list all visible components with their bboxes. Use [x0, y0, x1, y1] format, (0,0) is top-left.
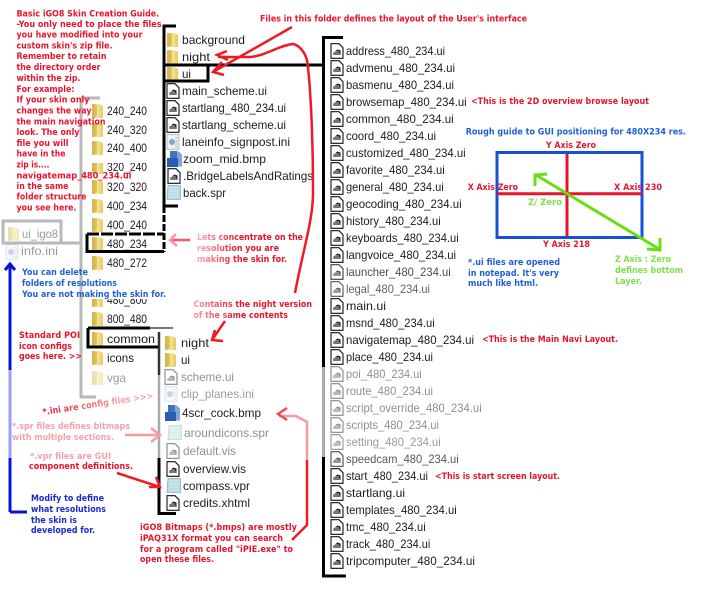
- heading: guide intro text: the main navigation: [16, 117, 106, 127]
- callout: modify info.ini: developed for.: [31, 526, 95, 536]
- callout: browse layout: <This is the 2D overview browse layout: [471, 97, 650, 107]
- panel: 480_234 ui file list: script_override_480_234.ui: [346, 401, 482, 415]
- panel: 480_234 ui file list: general_480_234.ui: [346, 180, 444, 194]
- callout: delete folders: You are not making the skin for.: [21, 290, 166, 300]
- callout: resolution focus: making the skin for.: [197, 255, 287, 265]
- panel: 480_234 ui file list: history_480_234.ui: [346, 214, 441, 228]
- callout: resolution focus: resolution you are: [197, 244, 279, 254]
- arrow: to 4scr_cock.bmp: [278, 408, 307, 540]
- axis labels: Y Axis Zero: [545, 141, 596, 151]
- heading: guide intro text: have in the: [16, 150, 66, 160]
- panel: 480_234 ui file list: tripcomputer_480_234.ui: [346, 554, 475, 568]
- panel: resolution folder list: 240_320: [107, 123, 147, 137]
- axis labels: X Axis Zero: [468, 183, 518, 193]
- note: ui files in notepad: [468, 258, 560, 289]
- callout: bitmap format: iGO8 Bitmaps (*.bmps) are mostly: [140, 523, 297, 533]
- panel: ui folder contents: [167, 33, 313, 200]
- panel: 480_234 ui file list: geocoding_480_234.ui: [346, 197, 462, 211]
- callout: vpr files: [29, 452, 133, 472]
- arrow: to compass.vpr: [117, 473, 160, 487]
- panel: resolution folder list: 240_400: [107, 141, 147, 155]
- panel: 480_234 ui file list: setting_480_234.ui: [346, 435, 441, 449]
- arrow: blue resolution bracket: [5, 264, 27, 512]
- panel: common folder contents: ui: [181, 353, 190, 367]
- panel: common folder contents: credits.xhtml: [183, 496, 250, 510]
- panel: 480_234 ui file list: langvoice_480_234.ui: [346, 248, 456, 262]
- arrow: to common night folder: [212, 321, 225, 341]
- panel: common folder contents: compass.vpr: [183, 479, 250, 493]
- callout: ini files: *.ini are config files >>>: [42, 392, 154, 418]
- heading: guide intro text: navigatemap_480_234.ui: [16, 171, 132, 181]
- heading: GUI positioning guide: Rough guide to GUI positioning for 480X234 res.: [466, 128, 686, 138]
- panel: ui folder contents: main_scheme.ui: [182, 84, 267, 98]
- callout: bitmap format: for a program called "iPIE.exe" to: [140, 545, 293, 555]
- callout: spr files: [12, 422, 130, 443]
- callout: POI icon configs: [19, 331, 82, 362]
- callout: POI icon configs: goes here. >>: [19, 352, 82, 362]
- heading: guide intro text: look. The only: [16, 128, 80, 138]
- panel: 480_234 ui file list: main.ui: [346, 299, 386, 313]
- callout: modify info.ini: the skin is: [31, 516, 77, 526]
- panel: 480_234 ui file list: tmc_480_234.ui: [346, 520, 426, 534]
- panel: 480_234 ui file list: startlang.ui: [346, 486, 405, 500]
- note: z axis: [615, 255, 683, 287]
- panel: resolution folder list: 240_240: [107, 104, 147, 118]
- panel: 480_234 ui file list: favorite_480_234.ui: [346, 163, 445, 177]
- heading: guide intro text: folder structure: [16, 193, 86, 203]
- panel: 480_234 ui file list: poi_480_234.ui: [346, 367, 422, 381]
- arrow: to aroundicons.spr: [125, 428, 160, 442]
- callout: files in this folder: Files in this folder defines the layout of the User's interface: [260, 14, 527, 24]
- callout: vpr files: component definitions.: [29, 462, 133, 472]
- panel: 480_234 ui file list: basmenu_480_234.ui: [346, 78, 454, 92]
- panel: 480_234 ui file list: customized_480_234.ui: [346, 146, 466, 160]
- panel: 480_234 ui file list: scripts_480_234.ui: [346, 418, 439, 432]
- heading: guide intro text: file you will: [16, 139, 68, 149]
- folder tree brackets: [3, 26, 346, 576]
- panel: 480_234 ui file list: legal_480_234.ui: [346, 282, 430, 296]
- heading: guide intro text: you have modified into your: [16, 31, 143, 41]
- panel: ui folder contents: laneinfo_signpost.ini: [182, 135, 290, 149]
- heading: guide intro text: zip is....: [16, 161, 50, 171]
- heading: guide intro text: [16, 10, 162, 214]
- y axis line: [566, 154, 568, 236]
- panel: ui folder contents: ui: [182, 67, 191, 81]
- panel: common folder contents: scheme.ui: [181, 370, 234, 384]
- panel: resolution folder list: 320_320: [107, 180, 147, 194]
- screen rectangle: [497, 152, 642, 238]
- panel: 480_234 ui file list: msnd_480_234.ui: [346, 316, 435, 330]
- callout: delete folders: [21, 268, 166, 300]
- panel: common folder contents: night: [181, 336, 210, 350]
- callout: POI icon configs: icon configs: [19, 342, 72, 352]
- panel: common folder contents: aroundicons.spr: [184, 426, 269, 440]
- panel: ui folder contents: .BridgeLabelsAndRatings: [183, 169, 313, 183]
- panel: resolution folder list: 480_234: [107, 237, 147, 251]
- panel: 480_234 ui file list: start_480_234.ui: [346, 469, 428, 483]
- z axis arrow: [535, 174, 660, 250]
- arrow: to night folder and file list: [217, 44, 313, 293]
- panel: resolution folder list: common: [107, 332, 155, 346]
- panel: ui folder contents: startlang_480_234.ui: [182, 101, 286, 115]
- note: ui files in notepad: much like html.: [468, 279, 538, 289]
- heading: guide intro text: custom skin's zip file.: [16, 41, 112, 51]
- callout: bitmap format: [140, 523, 297, 565]
- callout: modify info.ini: what resolutions: [31, 505, 106, 515]
- panel: ui folder contents: zoom_mid.bmp: [183, 152, 266, 166]
- heading: guide intro text: For example:: [16, 85, 74, 95]
- panel: ui folder contents: startlang_scheme.ui: [182, 118, 286, 132]
- panel: 480_234 ui file list: common_480_234.ui: [346, 112, 454, 126]
- panel: common folder contents: overview.vis: [183, 462, 246, 476]
- callout: modify info.ini: [31, 494, 106, 536]
- axis labels: Y Axis 218: [542, 240, 590, 250]
- note: z axis: Z Axis : Zero: [615, 255, 671, 265]
- callout: bitmap format: iPAQ31X format you can search: [140, 534, 283, 544]
- callout: night version: Contains the night version: [194, 300, 312, 310]
- panel: resolution folder list: 400_234: [107, 199, 147, 213]
- panel: resolution folder list: 800_480: [107, 312, 147, 326]
- panel: 480_234 ui file list: advmenu_480_234.ui: [346, 61, 455, 75]
- panel: skin root folder: [6, 227, 58, 259]
- panel: ui folder contents: background: [182, 33, 245, 47]
- panel: 480_234 ui file list: navigatemap_480_234.ui: [346, 333, 474, 347]
- note: ui files in notepad: in notepad. It's very: [468, 269, 559, 279]
- callout: resolution focus: [197, 233, 303, 265]
- panel: resolution folder list: 320_240: [107, 160, 147, 174]
- panel: 480_234 ui file list: address_480_234.ui: [346, 44, 445, 58]
- panel: ui folder contents: night: [182, 50, 211, 64]
- heading: guide intro text: Remember to retain: [16, 52, 106, 62]
- callout: night version: of the same contents: [194, 311, 288, 321]
- panel: resolution folder list: 480_272: [107, 256, 147, 270]
- panel: skin root folder: ui_igo8: [22, 227, 58, 241]
- panel: resolution folder list: vga: [107, 371, 126, 385]
- callout: spr files: with multiple sections.: [12, 433, 114, 443]
- panel: 480_234 ui file list: speedcam_480_234.ui: [346, 452, 459, 466]
- panel: common folder contents: default.vis: [183, 444, 236, 458]
- axis labels: [468, 141, 662, 250]
- arrow: to ui folder: [213, 27, 292, 75]
- panel: resolution folder list: icons: [107, 351, 134, 365]
- callout: resolution focus: Lets concentrate on the: [197, 233, 303, 243]
- chart: GUI axis diagram: [468, 141, 662, 250]
- panel: 480_234 ui file list: launcher_480_234.ui: [346, 265, 451, 279]
- panel: common folder contents: clip_planes.ini: [181, 387, 254, 401]
- axis labels: X Axis 230: [614, 183, 662, 193]
- callout: modify info.ini: Modify to define: [31, 494, 104, 504]
- arrow: to 480_234 folder: [170, 234, 190, 246]
- heading: guide intro text: -You only need to place the files: [16, 20, 162, 30]
- heading: guide intro text: within the zip.: [16, 74, 80, 84]
- heading: guide intro text: you see here.: [16, 204, 76, 214]
- panel: 480_234 ui file list: route_480_234.ui: [346, 384, 433, 398]
- axis labels: Z/ Zero: [528, 198, 562, 208]
- panel: resolution folder list: [86, 104, 156, 385]
- panel: skin root folder: info.ini: [21, 244, 58, 258]
- callout: delete folders: folders of resolutions: [22, 279, 117, 289]
- panel: resolution folder list: 400_240: [107, 218, 147, 232]
- callout: vpr files: *.vpr files are GUI: [30, 452, 111, 462]
- panel: 480_234 ui file list: coord_480_234.ui: [346, 129, 436, 143]
- heading: guide intro text: the directory order: [16, 63, 101, 73]
- panel: resolution folder list: 480_800: [107, 293, 147, 307]
- heading: guide intro text: in the same: [16, 182, 68, 192]
- callout: spr files: *.spr files defines bitmaps: [12, 422, 130, 432]
- callout: bitmap format: open these files.: [140, 555, 214, 565]
- panel: 480_234 ui file list: place_480_234.ui: [346, 350, 433, 364]
- callout: delete folders: You can delete: [21, 268, 88, 278]
- panel: 480_234 ui file list: [331, 44, 482, 568]
- callout: night version: [194, 300, 312, 321]
- panel: 480_234 ui file list: track_480_234.ui: [346, 537, 430, 551]
- panel: common folder contents: 4scr_cock.bmp: [182, 406, 261, 420]
- panel: common folder contents: [165, 336, 269, 510]
- note: z axis: Layer.: [615, 277, 642, 287]
- note: z axis: defines bottom: [615, 266, 683, 276]
- panel: 480_234 ui file list: keyboards_480_234.ui: [346, 231, 459, 245]
- panel: 480_234 ui file list: templates_480_234.ui: [346, 503, 457, 517]
- note: ui files in notepad: *.ui files are opened: [468, 258, 560, 268]
- callout: POI icon configs: Standard POI: [19, 331, 80, 341]
- callout: main navi layout: <This is the Main Navi Layout.: [482, 335, 618, 345]
- heading: guide intro text: Basic iGO8 Skin Creation Guide.: [16, 10, 159, 20]
- heading: guide intro text: changes the way: [16, 106, 92, 116]
- panel: ui folder contents: back.spr: [183, 186, 226, 200]
- x axis line: [497, 192, 642, 195]
- panel: 480_234 ui file list: browsemap_480_234.ui: [346, 95, 467, 109]
- callout: start screen layout: <This is start screen layout.: [435, 472, 560, 482]
- heading: guide intro text: If your skin only: [16, 96, 90, 106]
